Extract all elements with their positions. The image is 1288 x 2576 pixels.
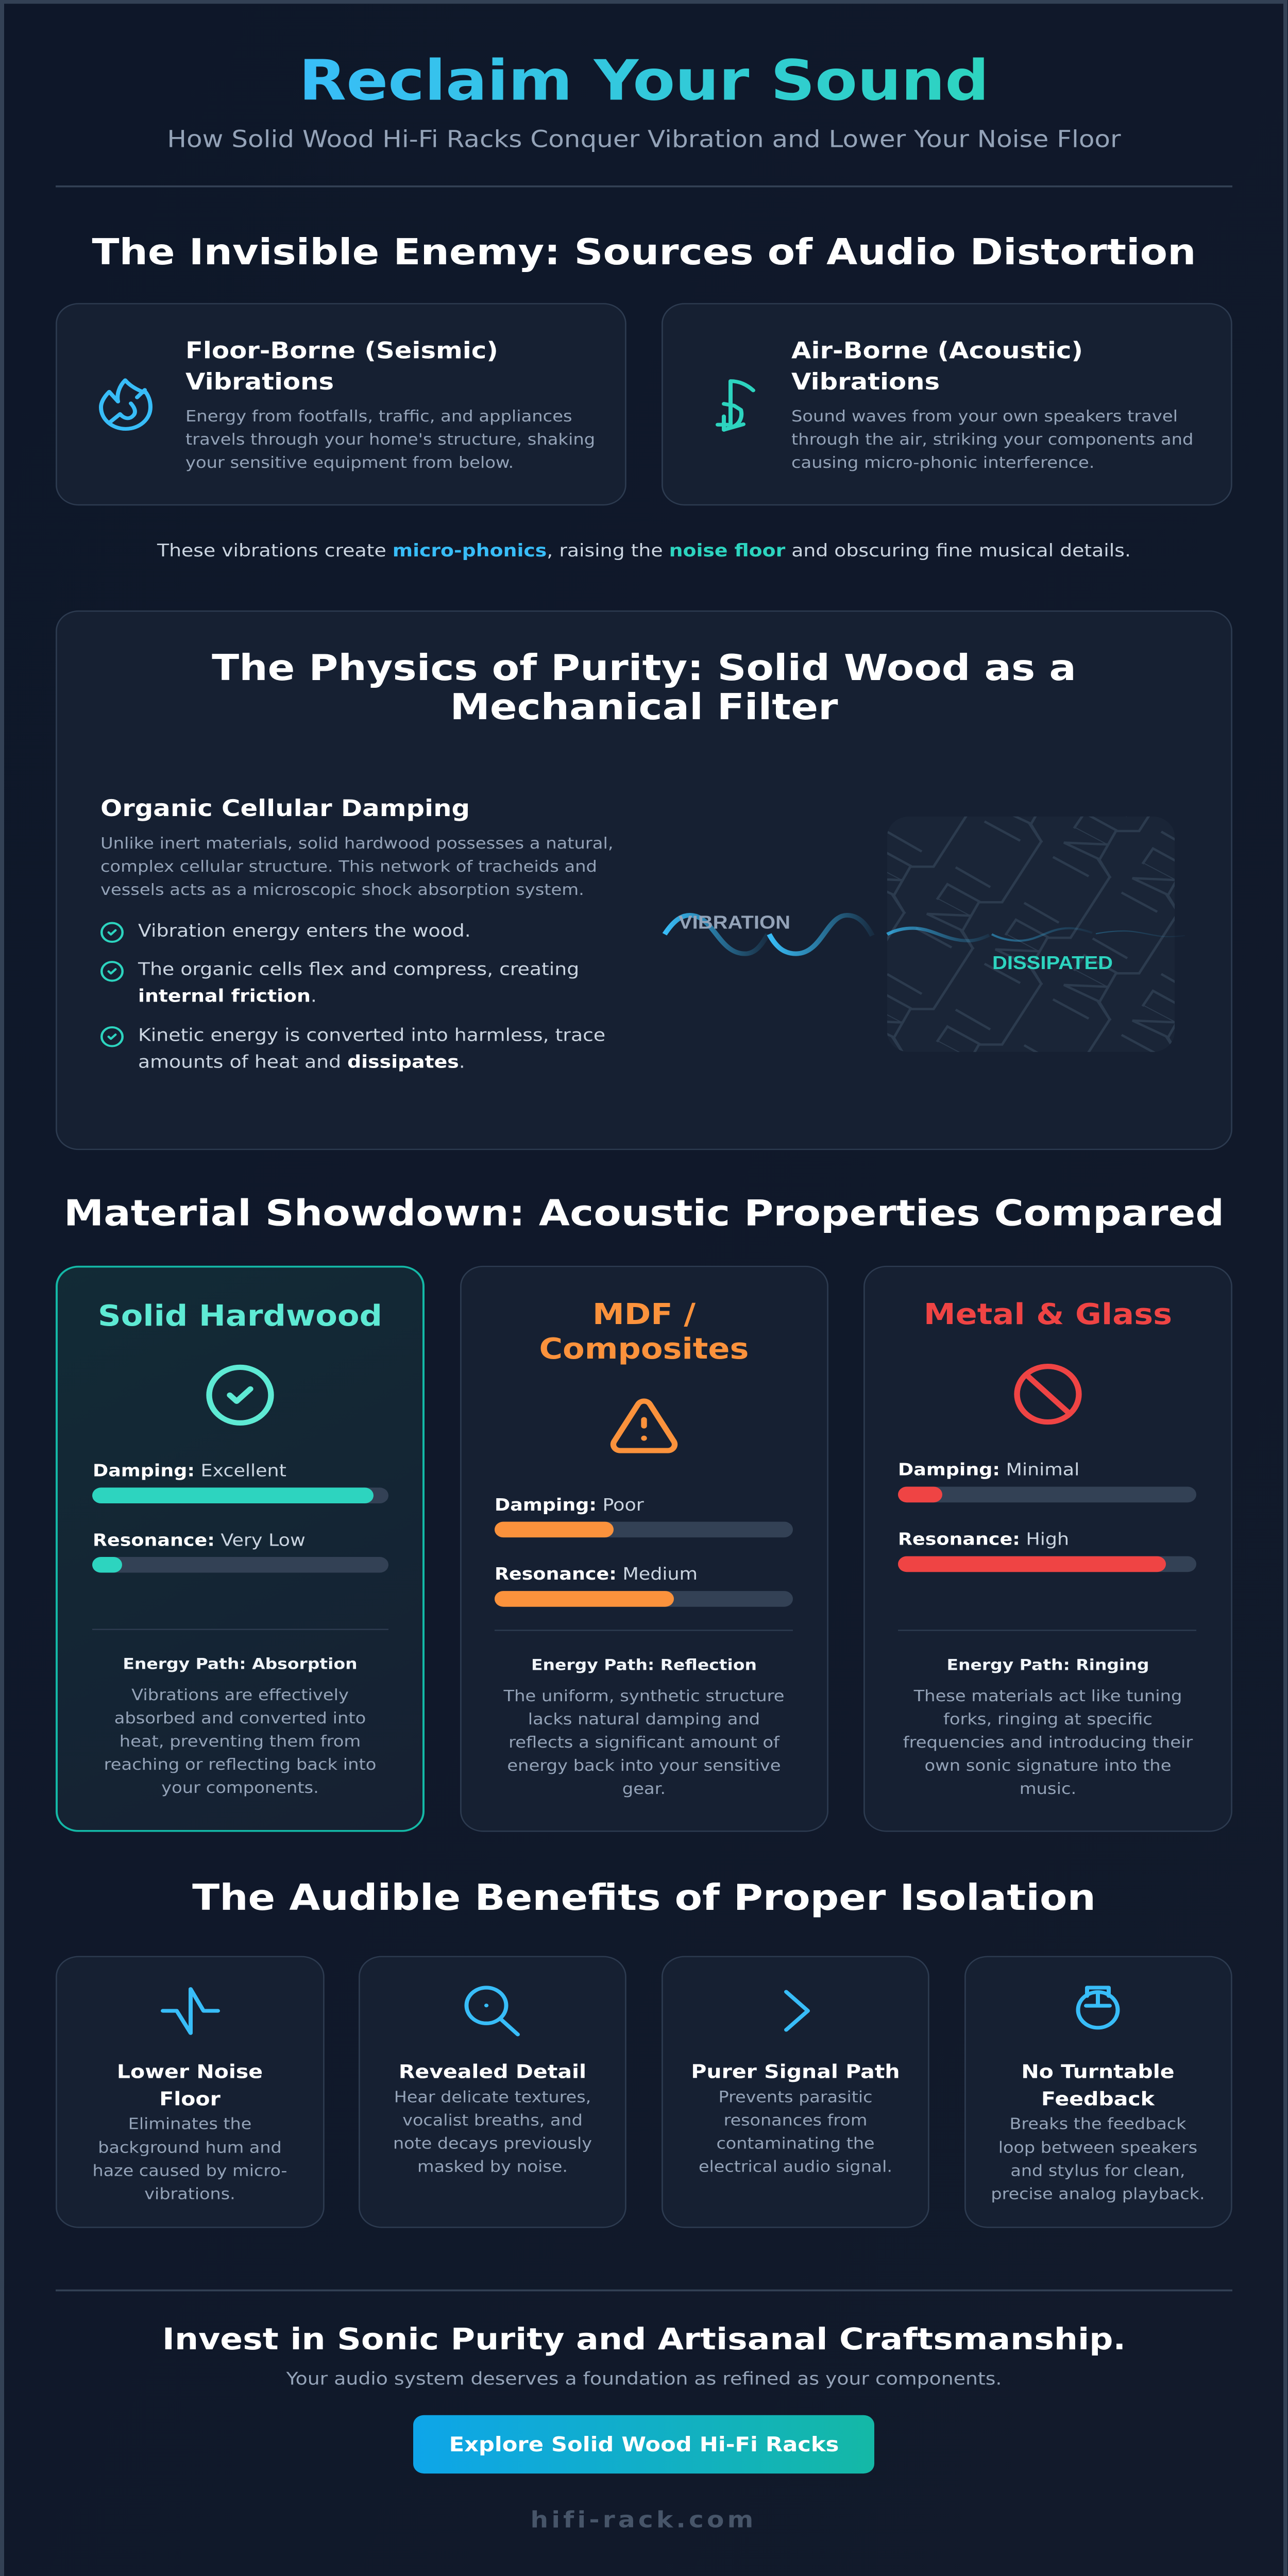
panel: air-borne vibrations [662,303,1231,505]
wood cell block [887,816,1175,1052]
icon: turntable dial [1078,1988,1118,2028]
panel: revealed detail [359,1957,625,2227]
icon: check 1 [101,923,123,942]
energy description: absorbed and converted into [114,1709,366,1727]
icon: chevron [786,1992,808,2030]
heading: The Physics of Purity: Solid Wood as a [212,647,1076,689]
cta button: Explore Solid Wood Hi-Fi Racks [449,2433,839,2456]
card description: your sensitive equipment from below. [185,453,514,472]
metric: resonance [92,1531,388,1573]
benefit title: Revealed Detail [399,2061,586,2083]
diagram: vibration absorbed by wood cells [663,816,1184,1052]
energy description: music. [1020,1779,1076,1798]
paragraph: Unlike inert materials, solid hardwood possesses a natural, [100,834,614,852]
card description: Sound waves from your own speakers travel [791,407,1178,426]
vibration wave [665,915,1185,954]
panel: mdf / composites [461,1266,828,1831]
energy description: energy back into your sensitive [507,1756,781,1774]
energy description: Vibrations are effectively [131,1686,349,1704]
card description: through the air, striking your components and [791,430,1193,449]
metric: resonance: Resonance: High [898,1530,1069,1549]
card title: Floor-Borne (Seismic) [185,337,498,364]
card title: MDF / [592,1297,696,1331]
benefit description: loop between speakers [998,2139,1197,2157]
benefit description: haze caused by micro- [93,2162,287,2180]
card title: Air-Borne (Acoustic) [791,337,1083,364]
card title: Vibrations [791,368,940,395]
heading: audible benefits: The Audible Benefits of Proper Isolation [192,1876,1096,1919]
metric: resonance: Resonance: Medium [495,1565,698,1584]
cta subtext: Your audio system deserves a foundation as refined as your components. [286,2369,1002,2389]
metric: resonance [495,1565,793,1607]
card description: travels through your home's structure, shaking [185,430,595,449]
energy description: own sonic signature into the [925,1756,1171,1774]
energy description: gear. [622,1779,666,1798]
panel: floor-borne vibrations [56,303,625,505]
energy path: Energy Path: Reflection [531,1656,757,1674]
icon: prohibited [1017,1366,1079,1422]
bullet 3: amounts of heat and [138,1052,347,1072]
card title: Vibrations [185,368,334,395]
benefit description: Eliminates the [128,2115,251,2133]
benefit description: background hum and [98,2139,282,2157]
site url: hifi-rack.com [531,2506,756,2533]
metric: damping: Damping: Excellent [93,1461,286,1481]
panel: no turntable feedback [965,1957,1231,2227]
metric: damping: Damping: Poor [495,1496,645,1515]
benefit title: No Turntable [1021,2061,1175,2083]
energy description: your components. [161,1778,319,1797]
call to action [162,2321,1126,2533]
icon: warning triangle [613,1401,675,1451]
card title: Solid Hardwood [98,1299,382,1332]
benefit description: and stylus for clean, [1010,2162,1185,2180]
metric: resonance [898,1530,1196,1572]
benefit description: electrical audio signal. [699,2158,892,2176]
metric: damping [495,1496,793,1537]
title: Reclaim Your Sound [299,48,989,113]
energy description: forks, ringing at specific [943,1709,1153,1728]
energy description: These materials act like tuning [914,1686,1182,1705]
panel: purer signal path [662,1957,928,2227]
bullet list [101,921,605,1072]
energy path: Energy Path: Ringing [947,1656,1149,1674]
subtitle: How Solid Wood Hi-Fi Racks Conquer Vibration and Lower Your Noise Floor [167,126,1121,153]
card description: causing micro-phonic interference. [791,453,1094,472]
benefit description: vibrations. [144,2185,235,2203]
header [167,48,1121,153]
heading: the invisible enemy: The Invisible Enemy: Sources of Audio Distortion [92,231,1196,273]
bullet 3: Kinetic energy is converted into harmless, trace [138,1025,605,1045]
icon: flame [101,380,150,429]
heading: Mechanical Filter [450,686,838,728]
heading: material showdown: Material Showdown: Acoustic Properties Compared [64,1192,1224,1234]
panel: physics of purity [56,610,1232,1150]
benefit title: Lower Noise [117,2061,263,2083]
energy description: reflects a significant amount of [509,1733,780,1751]
energy description: heat, preventing them from [120,1732,361,1751]
benefit description: precise analog playback. [991,2185,1205,2203]
benefit description: Prevents parasitic [719,2089,872,2106]
cta heading: Invest in Sonic Purity and Artisanal Craftsmanship. [162,2321,1126,2357]
bullet 2: internal friction [138,986,311,1006]
paragraph: vessels acts as a microscopic shock absorption system. [100,880,584,899]
benefit description: contaminating the [716,2135,875,2153]
benefit description: masked by noise. [417,2158,568,2176]
label: dissipated: DISSIPATED [992,953,1113,973]
subheading: organic cellular damping: Organic Cellular Damping [100,795,470,822]
energy description: The uniform, synthetic structure [504,1686,784,1705]
icon: magnifier [467,1988,518,2035]
energy path: Energy Path: Absorption [123,1655,358,1673]
bullet 3: dissipates. [347,1052,465,1072]
cta button [413,2415,874,2473]
card title: Composites [539,1332,749,1365]
bullet 2: The organic cells flex and compress, creating [138,959,579,979]
metric: damping [898,1460,1196,1502]
metric: damping [92,1461,388,1503]
icon: pulse [163,1989,218,2033]
benefit description: Hear delicate textures, [394,2089,591,2106]
panel: solid hardwood [57,1267,423,1831]
benefit description: vocalist breaths, and [402,2112,583,2129]
icon: music note [718,381,753,430]
card description: Energy from footfalls, traffic, and appliances [185,407,572,426]
icon: check 2 [101,962,123,981]
benefit description: Breaks the feedback [1009,2115,1187,2133]
benefit description: note decays previously [393,2135,592,2153]
panel: metal and glass [864,1266,1232,1831]
icon: check 3 [101,1027,123,1046]
icon: check circle [209,1367,271,1423]
energy description: lacks natural damping and [528,1709,760,1728]
benefit title: Feedback [1041,2088,1155,2110]
paragraph: complex cellular structure. This network of tracheids and [100,857,597,875]
benefit description: resonances from [724,2112,867,2129]
metric: resonance: Resonance: Very Low [93,1531,306,1550]
energy description: reaching or reflecting back into [104,1755,376,1774]
label: vibration: VIBRATION [679,912,790,933]
panel: lower noise floor [56,1957,324,2227]
summary sentence: These vibrations create micro-phonics, raising the noise floor and obscuring fine musical details. [157,541,1131,561]
card title: Metal & Glass [924,1297,1172,1331]
metric: damping: Damping: Minimal [898,1460,1079,1480]
bullet 1: Vibration energy enters the wood. [138,921,471,941]
benefit title: Purer Signal Path [691,2061,900,2083]
benefit title: Floor [159,2088,221,2110]
bullet 2: . [311,986,317,1006]
energy description: frequencies and introducing their [903,1733,1193,1751]
